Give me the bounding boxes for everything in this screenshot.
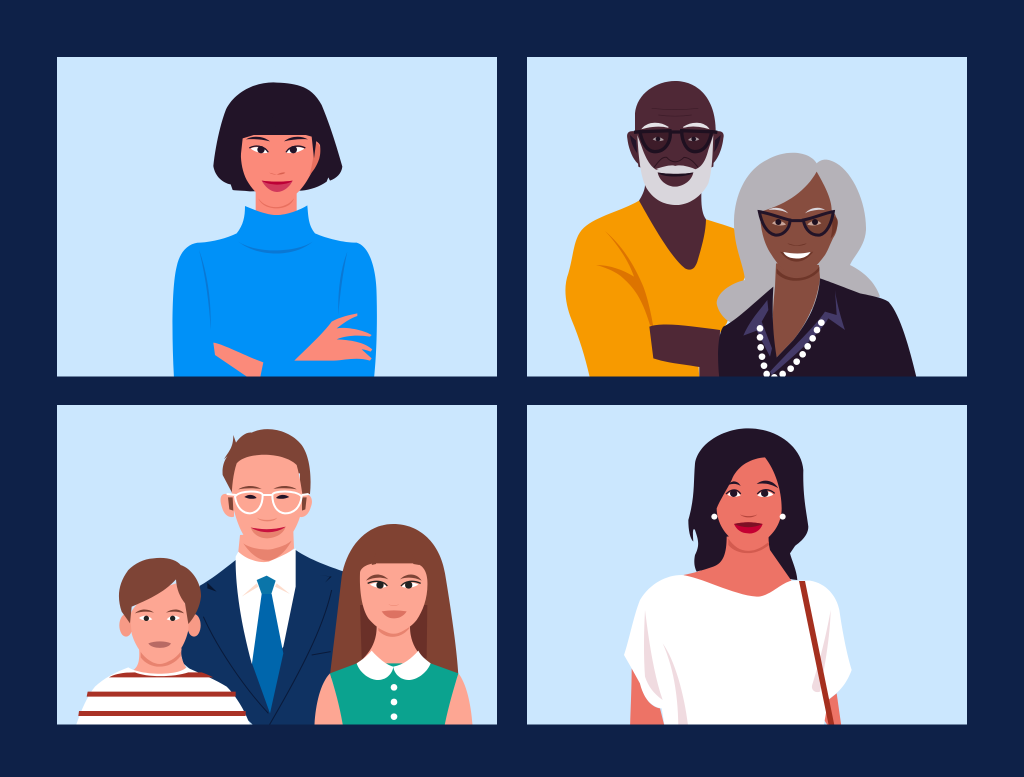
suit jacket	[180, 550, 344, 728]
neck shadow	[243, 541, 292, 561]
girl neck shadow	[378, 625, 409, 637]
panel: elderly couple	[527, 57, 967, 381]
panel: woman in white top	[527, 405, 967, 728]
lapel notches	[207, 575, 332, 592]
neck	[256, 192, 297, 215]
girl hair	[330, 524, 458, 675]
face	[717, 457, 782, 545]
fringe	[240, 135, 316, 158]
woman face	[760, 172, 838, 265]
neck and chest	[639, 185, 706, 270]
face	[240, 135, 320, 194]
eyes	[251, 147, 304, 153]
woman glasses	[759, 212, 833, 235]
nose lines	[653, 157, 699, 169]
girl hair shadow	[360, 605, 427, 658]
eyes	[727, 491, 773, 497]
shirt shadows	[596, 231, 653, 327]
neck and chest	[683, 533, 793, 607]
boy eyebrows	[135, 609, 184, 613]
shirt stripes	[78, 672, 246, 716]
lips	[734, 522, 763, 533]
girl fringe notches	[372, 552, 419, 565]
collar shadow	[242, 583, 290, 597]
woman ear shadow	[831, 216, 838, 238]
blouse folds	[644, 610, 831, 728]
right hand	[294, 313, 372, 361]
left arm	[630, 668, 665, 728]
eyebrows	[728, 481, 778, 488]
right arm	[820, 693, 842, 728]
infographic: four portrait panels on navy background	[57, 57, 967, 724]
nose	[740, 514, 757, 517]
left hand under arm	[213, 343, 263, 378]
turtleneck sweater	[172, 205, 377, 378]
face side shadow	[309, 143, 320, 175]
woman jacket	[718, 278, 917, 378]
mouth	[658, 172, 693, 187]
eyes	[653, 137, 699, 141]
white blouse	[624, 575, 852, 728]
woman eyes	[772, 221, 821, 225]
boy striped shirt	[75, 667, 251, 728]
man glasses	[227, 491, 309, 513]
bag strap	[799, 581, 835, 728]
girl face	[360, 563, 427, 633]
glasses	[642, 132, 710, 150]
man eyes	[244, 495, 289, 499]
earrings	[711, 514, 717, 520]
boy mouth	[148, 641, 171, 648]
nose	[269, 172, 285, 175]
neck shadow	[728, 538, 769, 553]
panel: father with two children	[57, 405, 497, 728]
sweater folds	[199, 242, 347, 330]
boy neck shadow	[141, 652, 181, 667]
collar	[743, 290, 845, 375]
man eyebrows	[238, 486, 297, 489]
moustache	[656, 165, 696, 170]
woman nose	[787, 243, 807, 246]
man ears	[221, 494, 312, 517]
hair: short black bob	[213, 82, 342, 191]
peter pan collar	[357, 651, 431, 680]
orange shirt	[565, 201, 745, 378]
white shirt	[236, 548, 296, 677]
tie	[252, 594, 283, 713]
forehead wrinkles	[652, 108, 698, 116]
neck	[238, 532, 294, 562]
pearl necklace	[757, 319, 825, 381]
lips	[262, 181, 293, 192]
woman smile	[780, 252, 813, 262]
girl eyebrows	[366, 574, 422, 581]
boy hair	[119, 558, 201, 624]
girl nose and lips	[388, 604, 399, 606]
girl arms	[314, 673, 473, 728]
man sideburns	[228, 497, 307, 511]
woman silver hair	[717, 153, 880, 323]
long dark hair	[688, 428, 808, 580]
girl eyes	[370, 583, 418, 588]
boy ears	[119, 614, 133, 637]
boy face	[130, 583, 188, 664]
white eyebrows	[643, 123, 708, 128]
woman eyebrows	[768, 208, 825, 213]
eyebrows	[246, 137, 308, 141]
man face	[232, 455, 303, 550]
head	[635, 81, 716, 170]
girl neck	[363, 627, 423, 670]
boy neck	[133, 648, 187, 675]
boy eyes	[139, 616, 180, 620]
white beard	[637, 135, 713, 205]
lapel lines	[203, 590, 332, 725]
ears	[627, 131, 724, 165]
woman neck and chest	[773, 263, 820, 357]
panel: woman in blue turtleneck	[57, 57, 497, 378]
man nose	[257, 517, 277, 521]
man hair	[223, 429, 311, 494]
dress buttons	[391, 684, 397, 720]
forearm	[649, 325, 720, 378]
neck shadow	[777, 267, 819, 281]
neck shadow	[258, 198, 294, 208]
tie knot	[257, 576, 276, 594]
man mouth	[251, 527, 286, 538]
green dress	[330, 663, 458, 728]
